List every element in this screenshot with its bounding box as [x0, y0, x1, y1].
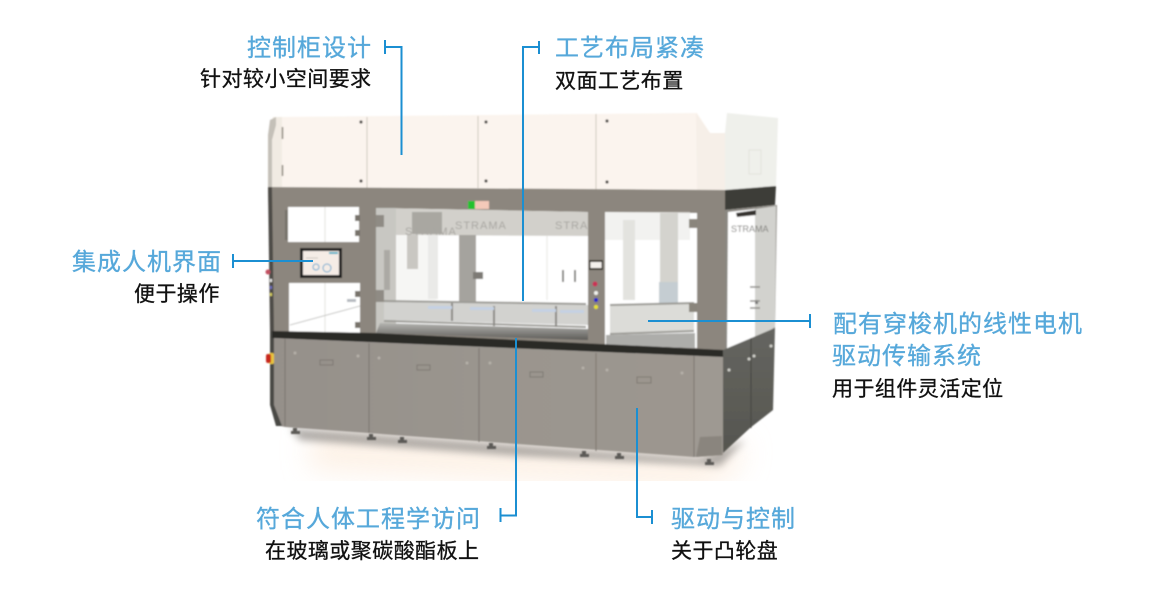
black work surface band: [272, 331, 724, 357]
linear conveyor: [384, 302, 588, 325]
control cabinet top housing: [268, 113, 778, 190]
callout: compact process layout: 工艺布局紧凑: [555, 35, 705, 62]
side indicator lights: [266, 270, 272, 296]
centre glass window: STRAMA: [455, 220, 507, 232]
callout: ergonomic access: 符合人体工程学访问: [256, 506, 481, 533]
callout: drive and control: [637, 408, 796, 563]
infographic: machine with callouts: [72, 36, 1082, 560]
callout: compact process layout: 双面工艺布置: [555, 70, 684, 93]
callout: control cabinet: [200, 35, 402, 155]
callout: linear motor transport: 用于组件灵活定位: [832, 378, 1004, 401]
callout: drive and control: 关于凸轮盘: [671, 540, 778, 563]
callout: linear motor transport: 驱动传输系统: [832, 343, 982, 370]
levelling feet: [291, 428, 714, 465]
lower cabinet: [270, 332, 723, 457]
dark end cabinet: [723, 328, 775, 453]
callout: integrated HMI: 集成人机界面: [72, 249, 222, 276]
side windows in frame: [285, 207, 360, 333]
emergency stop button: [266, 353, 274, 364]
machine illustration: [266, 113, 778, 465]
callout: control cabinet: 控制柜设计: [247, 35, 372, 62]
callout: ergonomic access: [256, 338, 516, 563]
status lamp: [468, 201, 489, 209]
grey machine frame: [268, 186, 777, 352]
callout: linear motor transport: 配有穿梭机的线性电机: [833, 311, 1083, 338]
callout: integrated HMI: [72, 249, 313, 306]
callout: ergonomic access: 在玻璃或聚碳酸酯板上: [265, 540, 480, 563]
end-side window: [727, 206, 776, 349]
callout: control cabinet: 针对较小空间要求: [200, 68, 372, 91]
control buttons panel: [589, 260, 603, 309]
HMI touch screen: [300, 248, 342, 278]
callout: compact process layout: [523, 35, 705, 301]
callout: drive and control: 驱动与控制: [671, 506, 796, 533]
right glass window: [605, 212, 697, 348]
callout: integrated HMI: 便于操作: [134, 283, 220, 306]
centre glass window: STRA: [555, 220, 588, 232]
floor shadow: [288, 428, 748, 481]
end-side window: STRAMA: [731, 224, 769, 234]
centre glass window: STRAMA: [405, 226, 457, 238]
callout: linear motor transport: [648, 311, 1083, 401]
centre glass window: [376, 208, 588, 340]
